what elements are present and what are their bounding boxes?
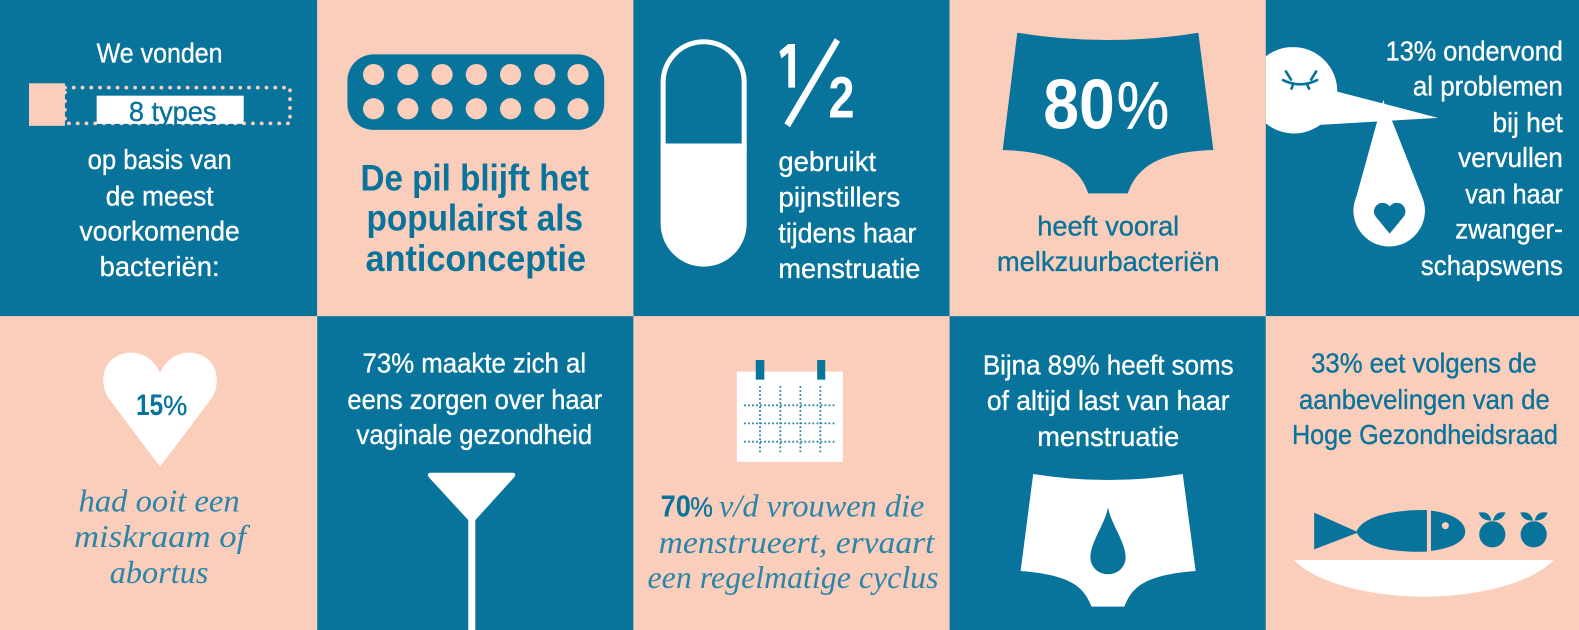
heading: de pil: De pil blijft het (361, 156, 589, 198)
icon: underwear with 80%: 80 (1043, 64, 1115, 143)
text: zwangerschapswens: vervullen (1458, 142, 1563, 173)
text: bacteria description: op basis van (88, 144, 232, 175)
text: zwangerschapswens: al problemen (1413, 71, 1563, 102)
icon: stork with bundle (1266, 47, 1438, 247)
panel: regular cycle (633, 316, 950, 630)
script text: cyclus: 70 (661, 491, 691, 524)
text: gezondheidsraad: aanbevelingen van de (1299, 384, 1550, 415)
text: last van menstruatie: menstruatie (1037, 421, 1179, 452)
panel: vaginal health (317, 316, 633, 630)
text: zwangerschapswens: 13% ondervond (1386, 35, 1563, 66)
panel: contraceptive pill (317, 0, 633, 316)
icon: calendar (737, 360, 843, 462)
panel: pregnancy wish (1266, 0, 1579, 316)
panel: miscarriage (0, 316, 317, 630)
text: zwangerschapswens: schapswens (1421, 250, 1563, 281)
text: bacteria description: bacteriën: (100, 251, 220, 282)
heading: de pil (361, 156, 589, 279)
text: zwangerschapswens: bij het (1492, 107, 1563, 138)
text: pijnstillers (778, 146, 920, 284)
icon: underwear with 80% (1003, 33, 1213, 193)
progress bar: 8 types: 8 types (129, 96, 217, 127)
icon: pill strip (347, 54, 604, 130)
script text: cyclus (648, 489, 939, 595)
heading: de pil: populairst als (367, 197, 583, 239)
script text: miskraam: miskraam of (74, 519, 251, 554)
icon: heart with 15% (103, 353, 217, 467)
panel: lactic acid bacteria (950, 0, 1266, 316)
panel: nutrition advice (1266, 316, 1579, 630)
icon: underwear with drop (1021, 474, 1196, 607)
text: last van menstruatie: of altijd last van haar (987, 385, 1230, 416)
icon: heart with 15%: % (163, 389, 187, 421)
script text: miskraam: abortus (110, 555, 208, 590)
text: last van menstruatie: Bijna 89% heeft soms (983, 350, 1234, 381)
text: bacteria description: de meest (106, 180, 214, 211)
heading: we vonden: We vonden (97, 37, 223, 68)
text: melkzuurbacteriën (997, 211, 1219, 277)
script text: miskraam (74, 484, 251, 590)
text: gezondheidsraad: 33% eet volgens de (1311, 348, 1537, 379)
text: zorgen (347, 348, 602, 450)
text: melkzuurbacteriën: heeft vooral (1037, 211, 1179, 242)
script text: cyclus: % (690, 491, 713, 523)
heading: de pil: anticonceptie (366, 237, 586, 279)
script text: miskraam: had ooit een (79, 484, 240, 519)
text: zorgen: eens zorgen over haar (347, 384, 602, 415)
text: bacteria description (80, 144, 240, 282)
icon: capsule half filled (661, 42, 747, 267)
script text: cyclus: een regelmatige cyclus (648, 560, 939, 595)
text: zorgen: vaginale gezondheid (356, 419, 592, 450)
text: melkzuurbacteriën: melkzuurbacteriën (997, 246, 1219, 277)
text: zwangerschapswens (1386, 35, 1563, 281)
panel: painkillers (633, 0, 950, 316)
icon: speculum funnel (428, 473, 515, 630)
script text: cyclus: menstrueert, ervaart (659, 525, 936, 560)
text: pijnstillers: menstruatie (778, 253, 920, 284)
panel: bacteria types (0, 0, 317, 316)
text: pijnstillers: pijnstillers (778, 181, 900, 212)
text: gezondheidsraad (1292, 348, 1558, 450)
statistic: one half: 2 (828, 65, 855, 130)
text: bacteria description: voorkomende (80, 216, 240, 247)
statistic: one half (779, 38, 855, 130)
panel: menstruation complaints (950, 316, 1266, 630)
progress bar: 8 types (29, 83, 290, 127)
text: zwangerschapswens: van haar (1465, 178, 1563, 209)
text: pijnstillers: tijdens haar (778, 218, 916, 249)
text: zorgen: 73% maakte zich al (363, 348, 586, 379)
script text: cyclus: v/d vrouwen die (719, 489, 925, 524)
icon: heart with 15%: 15 (136, 389, 163, 422)
icon: fish on plate with fruit (1294, 510, 1554, 597)
icon: underwear with 80%: % (1117, 69, 1169, 143)
text: last van menstruatie (983, 350, 1234, 452)
text: gezondheidsraad: Hoge Gezondheidsraad (1292, 419, 1558, 450)
text: pijnstillers: gebruikt (778, 146, 876, 177)
text: zwangerschapswens: zwanger- (1455, 214, 1563, 245)
